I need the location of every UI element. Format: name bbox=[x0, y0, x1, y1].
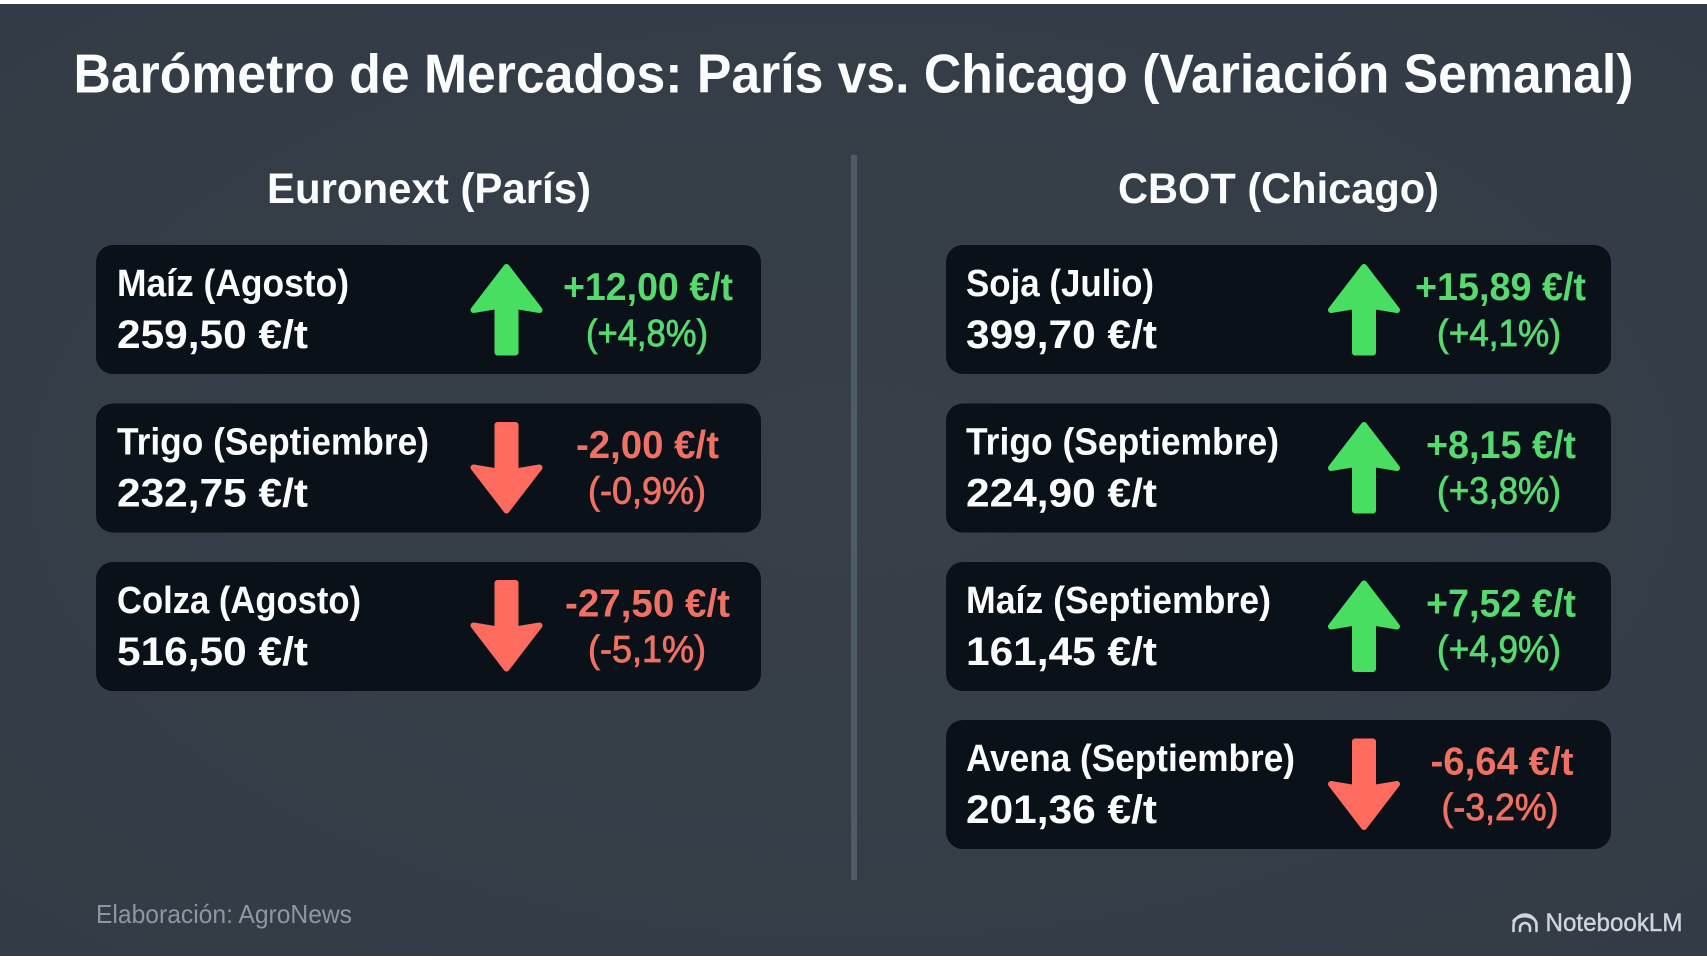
card: Avena Septiembre bbox=[946, 720, 1611, 849]
card: Trigo Septiembre París: (-0,9%) bbox=[588, 470, 706, 512]
card: Soja Julio: +15,89 €/t bbox=[1415, 266, 1586, 309]
card: Trigo Septiembre Chicago bbox=[946, 404, 1611, 532]
card: Colza Agosto: -27,50 €/t bbox=[565, 582, 730, 626]
card: Trigo Septiembre Chicago: (+3,8%) bbox=[1437, 470, 1561, 512]
source credit: Elaboración: AgroNews bbox=[96, 899, 352, 929]
card: Trigo Septiembre Chicago: +8,15 €/t bbox=[1426, 424, 1576, 467]
card: Avena Septiembre: Avena (Septiembre) bbox=[966, 738, 1295, 780]
panel: Euronext bbox=[96, 165, 761, 691]
card: Trigo Septiembre Chicago: 224,90 €/t bbox=[966, 472, 1157, 516]
card: Colza Agosto: Colza (Agosto) bbox=[117, 580, 361, 622]
card: Maíz Septiembre: (+4,9%) bbox=[1437, 629, 1561, 671]
card: Soja Julio: 399,70 €/t bbox=[966, 313, 1157, 357]
brand name: NotebookLM bbox=[1546, 909, 1682, 937]
card: Maíz Agosto: 259,50 €/t bbox=[117, 313, 308, 357]
card: Avena Septiembre: (-3,2%) bbox=[1442, 787, 1558, 829]
card: Soja Julio bbox=[946, 245, 1611, 374]
card: Avena Septiembre: -6,64 €/t bbox=[1430, 740, 1574, 784]
card: Trigo Septiembre París bbox=[96, 404, 761, 532]
panel: CBOT bbox=[946, 165, 1611, 849]
card: Maíz Septiembre: 161,45 €/t bbox=[966, 630, 1157, 674]
card: Colza Agosto: (-5,1%) bbox=[588, 629, 706, 671]
icon: NotebookLM arcs bbox=[1514, 915, 1536, 931]
card: Maíz Septiembre bbox=[946, 562, 1611, 691]
card: Maíz Agosto: Maíz (Agosto) bbox=[117, 263, 349, 305]
heading: CBOT: CBOT (Chicago) bbox=[1118, 165, 1439, 213]
heading: Euronext: Euronext (París) bbox=[267, 165, 591, 213]
card: Trigo Septiembre Chicago: Trigo (Septiembre) bbox=[966, 422, 1279, 464]
card: Soja Julio: Soja (Julio) bbox=[966, 263, 1154, 305]
card: Maíz Septiembre: +7,52 €/t bbox=[1426, 582, 1576, 626]
card: Trigo Septiembre París: 232,75 €/t bbox=[117, 472, 308, 516]
card: Maíz Septiembre: Maíz (Septiembre) bbox=[966, 580, 1271, 622]
card: Maíz Agosto bbox=[96, 245, 761, 374]
NotebookLM watermark bbox=[1514, 909, 1682, 937]
card: Soja Julio: (+4,1%) bbox=[1437, 313, 1561, 355]
card: Colza Agosto: 516,50 €/t bbox=[117, 630, 308, 674]
card: Trigo Septiembre París: Trigo (Septiembre) bbox=[117, 422, 429, 464]
center divider bbox=[851, 155, 857, 880]
card: Avena Septiembre: 201,36 €/t bbox=[966, 788, 1157, 832]
card: Maíz Agosto: +12,00 €/t bbox=[563, 266, 733, 309]
card: Maíz Agosto: (+4,8%) bbox=[586, 313, 708, 355]
title: Barómetro de Mercados: París vs. Chicago (Variación Semanal) bbox=[74, 42, 1634, 104]
card: Trigo Septiembre París: -2,00 €/t bbox=[576, 424, 719, 467]
card: Colza Agosto bbox=[96, 562, 761, 691]
